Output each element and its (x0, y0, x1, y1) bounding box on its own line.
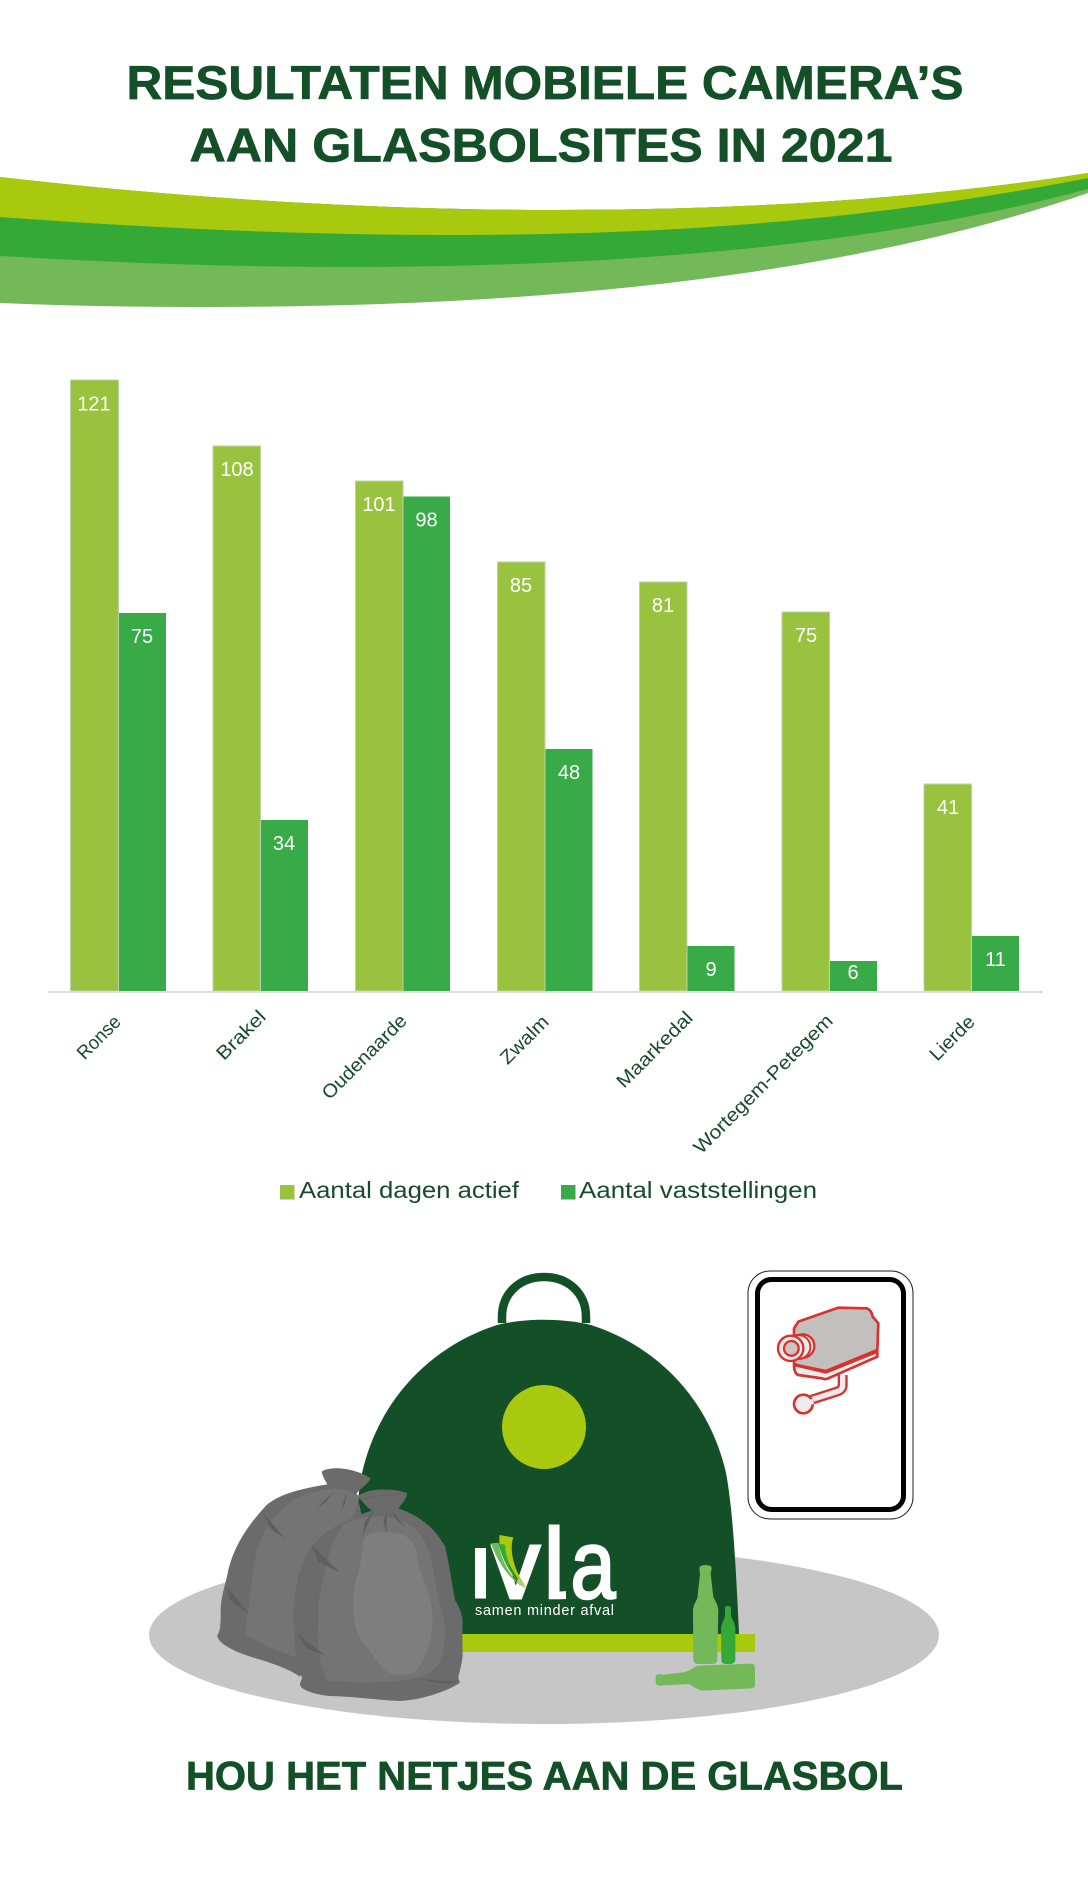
bin lime stripe (400, 1634, 755, 1652)
bars: aantal dagen actief (70, 380, 972, 991)
glass bin (349, 1277, 755, 1652)
axis labels: Brakel (213, 1007, 271, 1065)
data labels: 101 (362, 494, 396, 516)
legend: Aantal vaststellingen (579, 1177, 817, 1203)
front bag (293, 1489, 463, 1701)
data labels: 34 (273, 833, 295, 855)
logo swoosh (491, 1535, 527, 1588)
axis (48, 991, 1043, 993)
title: AAN GLASBOLSITES IN 2021 (190, 118, 892, 172)
data labels: 75 (795, 625, 817, 647)
axis labels: Ronse (73, 1012, 126, 1064)
icon: small bottle (721, 1606, 735, 1664)
garbage bags (217, 1468, 463, 1701)
axis labels: Oudenaarde (318, 1011, 412, 1104)
title (126, 56, 964, 172)
icon: security camera (778, 1308, 878, 1413)
data labels: 41 (937, 797, 959, 819)
data labels: 48 (558, 762, 580, 784)
ivla logo: l (543, 1508, 565, 1620)
axis labels (73, 1007, 980, 1158)
legend: Aantal dagen actief (299, 1177, 520, 1203)
data labels: 81 (652, 595, 674, 617)
title: RESULTATEN MOBIELE CAMERA’S (126, 56, 964, 109)
bin lime circle (502, 1385, 586, 1469)
header swoosh (0, 173, 1088, 307)
data labels: 11 (985, 949, 1006, 971)
data labels: 121 (77, 394, 111, 416)
axis labels: Lierde (926, 1012, 980, 1065)
data labels: 9 (705, 959, 717, 981)
axis labels: Maarkedal (613, 1008, 698, 1093)
icon: lying bottle (656, 1664, 755, 1691)
data labels (77, 394, 1006, 984)
footer slogan: HOU HET NETJES AAN DE GLASBOL (186, 1754, 903, 1798)
data labels: 75 (131, 626, 153, 648)
bin handle (502, 1277, 586, 1323)
ivla logo: a (570, 1510, 616, 1619)
data labels: 108 (220, 459, 254, 481)
ground ellipse (149, 1546, 939, 1724)
legend (280, 1177, 817, 1203)
axis labels: Wortegem-Petegem (690, 1011, 838, 1158)
data labels: 85 (510, 575, 532, 597)
camera sign (748, 1271, 913, 1519)
bars: aantal vaststellingen (119, 496, 1019, 991)
icon: tall bottle (693, 1565, 718, 1664)
glass bottles (656, 1565, 755, 1691)
ivla logo (475, 1508, 616, 1620)
data labels: 6 (847, 962, 859, 984)
data labels: 98 (415, 510, 438, 532)
axis labels: Zwalm (496, 1012, 554, 1069)
bin body (349, 1320, 739, 1634)
back bag (217, 1468, 371, 1677)
ivla logo: v (492, 1509, 540, 1619)
bar chart (48, 380, 1043, 1203)
ivla logo: samen minder afval (475, 1603, 614, 1619)
